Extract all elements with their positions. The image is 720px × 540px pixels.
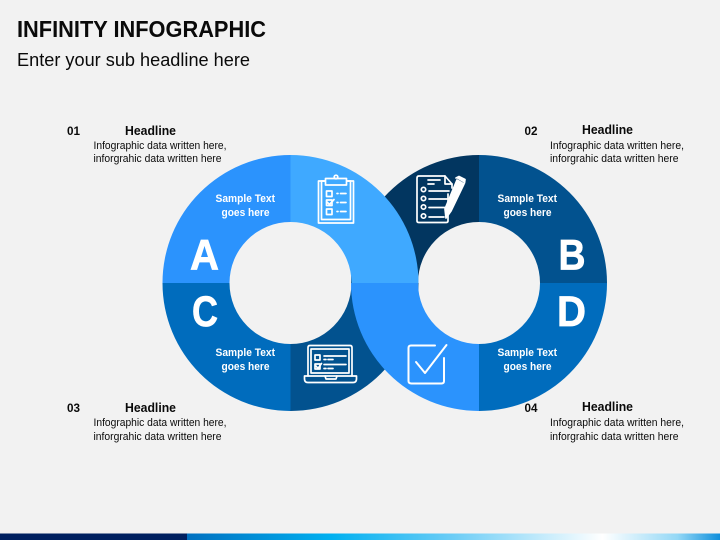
label 02: inforgrahic data written here <box>550 153 678 165</box>
letter C: C <box>192 288 218 336</box>
label 03: Headline <box>125 401 176 415</box>
label 01: Headline <box>125 124 176 138</box>
sample text A: goes here <box>222 207 270 219</box>
label 04: 04 <box>524 403 538 415</box>
sample text C <box>216 347 275 373</box>
label 01: 01 <box>67 126 81 138</box>
icon: document with pencil <box>417 176 465 222</box>
segment: right ring bottom-left <box>351 283 479 411</box>
segment C <box>162 283 290 411</box>
label 04: Infographic data written here, <box>550 417 684 429</box>
letter A: A <box>190 232 219 280</box>
icon: checkbox tick <box>408 345 446 384</box>
sample text A <box>216 193 275 219</box>
sample text D: Sample Text <box>498 347 557 359</box>
segment D <box>479 283 607 411</box>
label 03: 03 <box>67 403 80 415</box>
sample text B: Sample Text <box>498 193 557 205</box>
label 03 <box>67 401 226 443</box>
label 02: Headline <box>582 123 633 137</box>
label 02: 02 <box>524 126 538 138</box>
letter D: D <box>557 288 586 336</box>
icon: clipboard checklist <box>318 175 354 223</box>
icon: laptop checklist <box>304 346 356 382</box>
label 03: Infographic data written here, <box>94 417 226 429</box>
label 04 <box>524 400 684 443</box>
label 04: Headline <box>582 400 633 414</box>
label 02 <box>524 123 684 165</box>
letter B: B <box>558 232 586 280</box>
segment: right ring top-left dark <box>351 155 479 283</box>
sample text D: goes here <box>504 361 552 373</box>
label 02: Infographic data written here, <box>550 140 684 152</box>
segment B <box>479 155 607 283</box>
subtitle: Enter your sub headline here <box>17 49 250 70</box>
segment: left ring top-right light <box>290 155 418 283</box>
sample text B: goes here <box>504 207 552 219</box>
infinity diagram <box>162 155 607 411</box>
sample text B <box>498 193 557 219</box>
label 01 <box>67 124 226 165</box>
segment A <box>162 155 290 283</box>
sample text A: Sample Text <box>216 193 275 205</box>
label 04: inforgrahic data written here <box>550 431 678 443</box>
sample text C: Sample Text <box>216 347 275 359</box>
segment: left ring bottom-right dark <box>290 283 418 411</box>
label 01: inforgrahic data written here <box>94 153 222 165</box>
label 01: Infographic data written here, <box>94 140 226 152</box>
title: INFINITY INFOGRAPHIC <box>17 16 266 42</box>
label 03: inforgrahic data written here <box>94 431 222 443</box>
footer bar <box>0 534 720 540</box>
sample text C: goes here <box>222 361 270 373</box>
sample text D <box>498 347 557 373</box>
